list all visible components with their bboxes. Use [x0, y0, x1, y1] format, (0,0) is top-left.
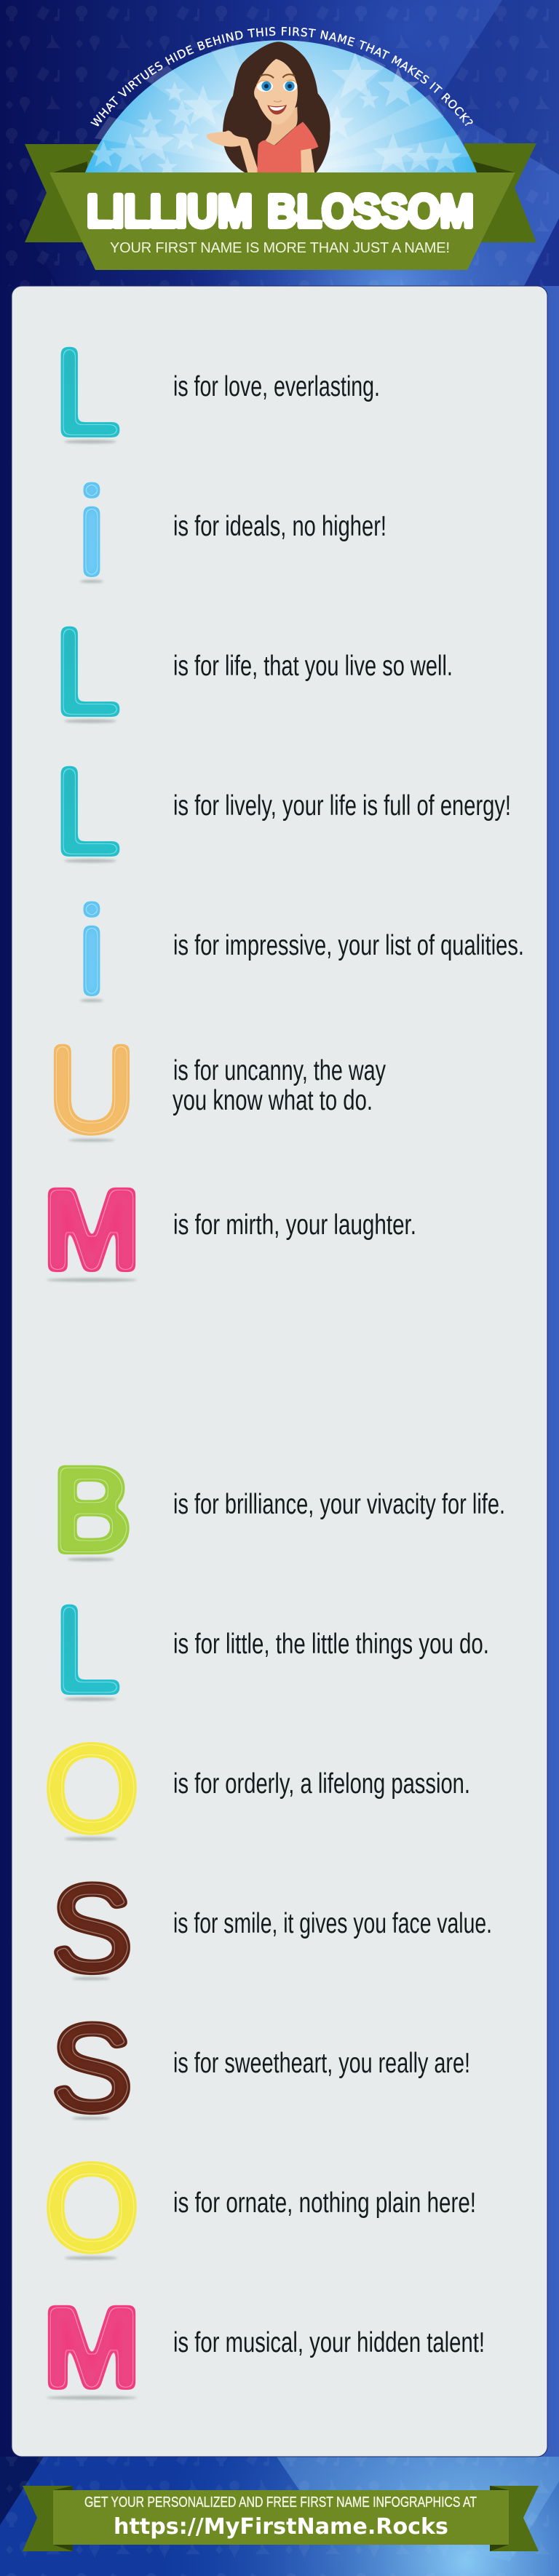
row: i impressive [78, 882, 524, 1019]
row: L lively: L [54, 742, 121, 880]
footer ribbon [23, 2486, 539, 2551]
eyebrows [260, 74, 295, 78]
sunburst dome [85, 40, 477, 176]
row: L love [54, 323, 380, 461]
row: U uncanny: U [47, 1020, 136, 1158]
left eye [257, 81, 273, 92]
row: S sweetheart: S [51, 1999, 132, 2136]
row: B brilliance [52, 1440, 505, 1580]
header ribbon back: left tail [25, 144, 102, 242]
neck and chest [265, 107, 298, 146]
row: L life: L [54, 603, 121, 740]
row: M musical: M [42, 2282, 141, 2412]
row: M mirth: is for mirth, your laughter. [173, 1209, 416, 1241]
row: L love: L [54, 323, 121, 461]
row: O orderly [44, 1720, 470, 1857]
right arm [301, 148, 314, 173]
row: L little: L [54, 1581, 121, 1718]
row: L lively [54, 742, 511, 880]
hair [223, 41, 330, 173]
first name: LILLIUM [87, 185, 253, 237]
row: S sweetheart [51, 1999, 470, 2136]
footer url: https://MyFirstName.Rocks [114, 2514, 448, 2540]
row: S smile [51, 1859, 492, 1997]
row: U uncanny [47, 1020, 386, 1158]
row: i impressive: i [78, 882, 106, 1019]
row: S smile: S [51, 1859, 132, 1997]
row: L little [54, 1581, 489, 1718]
row: i ideals [78, 463, 386, 600]
left arm and hand [207, 130, 259, 173]
row: i ideals: i [78, 463, 106, 600]
row: L love: is for love, everlasting. [173, 371, 380, 402]
eye shadows [256, 79, 297, 87]
row: U uncanny: you know what to do. [173, 1085, 373, 1116]
row: O ornate: O [44, 2139, 140, 2276]
name title [87, 185, 474, 237]
row: U uncanny: is for uncanny, the way [173, 1055, 386, 1086]
row: M mirth: M [42, 1164, 141, 1295]
curved tagline: WHAT VIRTUES HIDE BEHIND THIS FIRST NAME THAT MAKES IT ROCK? [90, 27, 473, 127]
subtitle: YOUR FIRST NAME IS MORE THAN JUST A NAME! [110, 240, 450, 256]
row: O ornate [44, 2139, 476, 2276]
last name: BLOSSOM [267, 185, 474, 237]
face [254, 59, 298, 124]
hair strand over forehead [256, 86, 257, 87]
row: M musical [42, 2282, 485, 2412]
nose [274, 100, 282, 102]
header ribbon front [49, 172, 515, 270]
header ribbon back: right tail [464, 143, 536, 242]
mouth [267, 105, 287, 114]
row: O orderly: is for orderly, a lifelong passion. [173, 1768, 470, 1800]
row: O orderly: O [44, 1720, 140, 1857]
right eye [283, 81, 297, 92]
illustration: woman with long dark hair [207, 41, 330, 173]
row: i ideals: is for ideals, no higher! [173, 511, 386, 542]
row: L life [54, 603, 453, 740]
row: L life: is for life, that you live so well. [173, 651, 453, 682]
shirt [257, 122, 318, 173]
row: B brilliance: B [52, 1440, 133, 1580]
row: M mirth [42, 1164, 416, 1295]
